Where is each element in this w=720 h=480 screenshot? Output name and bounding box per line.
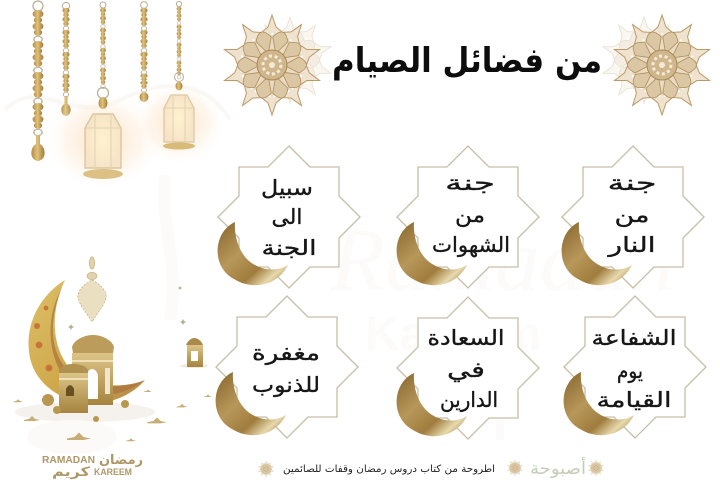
card: path to paradise <box>218 146 360 288</box>
spheres <box>42 394 129 422</box>
background watermark: Kareem <box>365 308 541 361</box>
card: forgiveness: للذنوب <box>252 373 320 397</box>
card: protection from desires: جنة <box>445 171 495 195</box>
card: path to paradise: الى <box>272 205 302 229</box>
card: protection from desires: الشهوات <box>432 233 510 257</box>
small stars <box>13 286 212 441</box>
card: forgiveness <box>216 296 358 438</box>
ramadan kareem wordmark: KAREEM <box>94 467 132 477</box>
background watermark: Ramadan <box>329 211 675 310</box>
mandala right <box>600 15 713 115</box>
small domed building <box>59 364 88 413</box>
ramadan kareem wordmark: RAMADAN <box>42 455 95 466</box>
hanging bead chain 2 <box>61 2 71 116</box>
mandala left <box>221 15 334 115</box>
footer source line <box>258 457 604 479</box>
card: path to paradise: سبيل <box>261 176 313 200</box>
card: protection from desires: من <box>455 203 485 227</box>
card: protection from fire: من <box>614 203 650 227</box>
card: intercession: القيامة <box>596 388 672 412</box>
ramadan kareem wordmark: رمضان <box>99 453 143 468</box>
ornament pendant <box>78 257 106 322</box>
card: protection from desires <box>397 146 539 288</box>
hanging lantern large <box>45 2 161 190</box>
card: protection from fire: جنة <box>608 171 656 195</box>
distant lantern <box>180 338 208 368</box>
hanging lantern small <box>133 1 225 165</box>
card: intercession <box>564 296 706 438</box>
hanging bead chain 4 <box>140 2 148 102</box>
card: happiness <box>397 297 539 439</box>
card: happiness: السعادة <box>428 326 504 350</box>
ramadan illustration <box>13 257 212 454</box>
footer source line: أصبوحة <box>530 457 586 479</box>
ramadan kareem wordmark: كريم <box>52 465 91 480</box>
card: intercession: يوم <box>617 359 643 383</box>
big domed building <box>72 335 114 405</box>
ramadan kareem wordmark <box>42 453 143 480</box>
card: path to paradise: الجنة <box>262 236 316 260</box>
title: من فضائل الصيام <box>332 41 602 81</box>
hanging bead chain 1 <box>31 1 45 161</box>
background watermark <box>5 86 675 440</box>
card: happiness: الدارين <box>440 388 498 412</box>
card: happiness: في <box>447 358 485 382</box>
card: protection from fire: النار <box>607 233 656 257</box>
card: intercession: الشفاعة <box>592 326 676 350</box>
card: forgiveness: مغفرة <box>252 341 320 365</box>
card: protection from fire <box>562 146 704 288</box>
footer source line: اطروحة من كتاب دروس رمضان وقفات للصائمين <box>283 464 495 475</box>
